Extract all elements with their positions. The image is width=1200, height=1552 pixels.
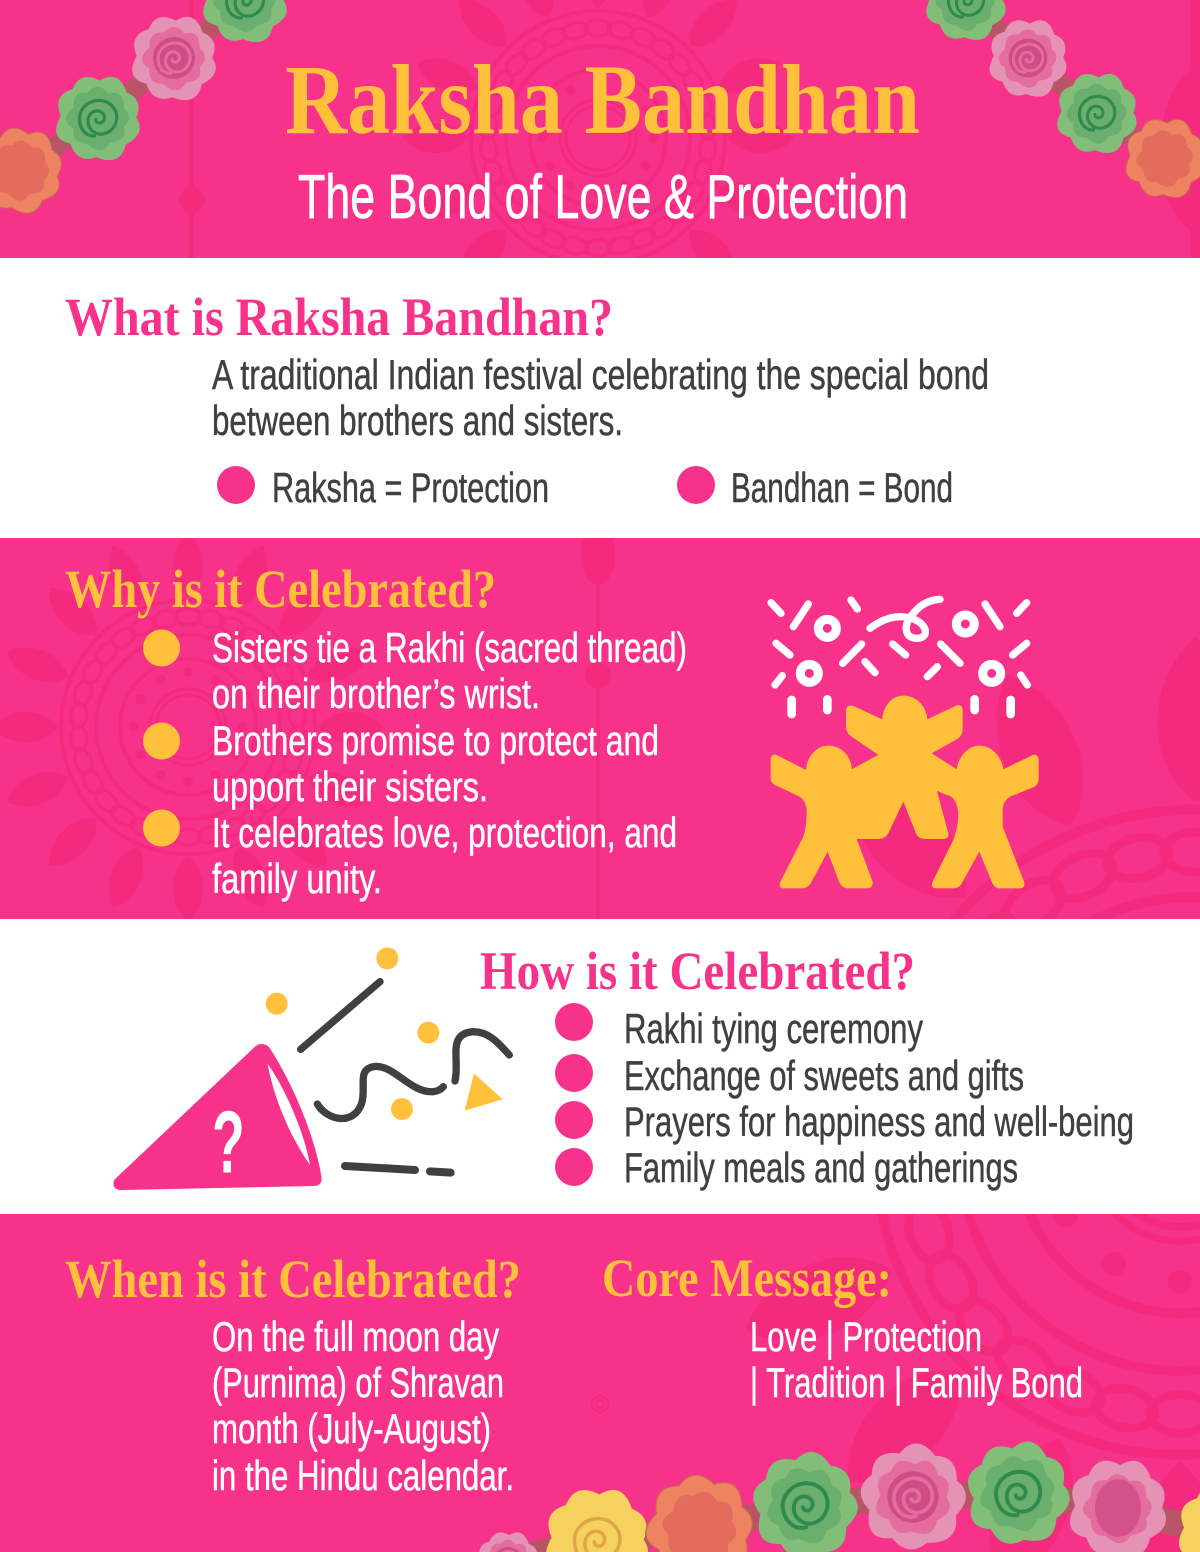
panel: when and core message [0,1214,1200,1552]
subtitle: The Bond of Love & Protection [298,163,908,232]
bullet: unity: family unity. [212,855,382,902]
bullet: unity [143,809,677,902]
list: how it is celebrated: Family meals and gatherings [624,1144,1018,1191]
text: core message: Love | Protection [750,1313,982,1360]
heading: what: What is Raksha Bandhan? [65,287,613,347]
bullet: rakhi: on their brother’s wrist. [212,670,540,717]
text: when [212,1313,514,1499]
rakhi garland: bottom [479,1436,1200,1552]
rakhi garland: top left [0,0,285,216]
icon: celebrating family with confetti [771,599,1039,888]
heading: core message: Core Message: [602,1248,892,1308]
bullet: Raksha [217,464,549,511]
bullet: Bandhan [677,464,953,511]
text: core message: | Tradition | Family Bond [750,1359,1083,1406]
bullet: brothers: Brothers promise to protect and [212,717,659,764]
text: when: On the full moon day [212,1313,499,1360]
bullet: brothers [143,717,659,810]
panel: what is Raksha Bandhan [0,258,1200,538]
list: how it is celebrated: Exchange of sweets and gifts [624,1052,1024,1099]
panel: why is it celebrated [0,538,1200,919]
panel: header [0,0,1200,258]
icon: party popper: ? [212,1092,245,1191]
rakhi garland: top right [928,0,1200,196]
panel: how is it celebrated [0,919,1200,1214]
heading: when: When is it Celebrated? [65,1249,521,1309]
list: how it is celebrated [555,1003,1134,1191]
bullet: unity: It celebrates love, protection, and [212,809,677,856]
text: when: month (July-August) [212,1405,491,1452]
definition text [212,351,989,444]
heading: why: Why is it Celebrated? [65,559,496,619]
bullet: rakhi: Sisters tie a Rakhi (sacred thread) [212,624,687,671]
bullet: Raksha: Raksha = Protection [272,464,549,511]
text: core message [750,1313,1083,1406]
bullet: rakhi [143,624,687,717]
heading: how: How is it Celebrated? [480,941,915,1001]
bullet: brothers: upport their sisters. [212,763,488,810]
text: when: (Purnima) of Shravan [212,1359,504,1406]
definition text: between brothers and sisters. [212,397,623,444]
icon: party popper [113,947,509,1191]
list: how it is celebrated: Rakhi tying ceremony [624,1005,923,1052]
text: when: in the Hindu calendar. [212,1452,514,1499]
title: Raksha Bandhan [285,44,920,155]
bullet: Bandhan: Bandhan = Bond [731,464,953,511]
